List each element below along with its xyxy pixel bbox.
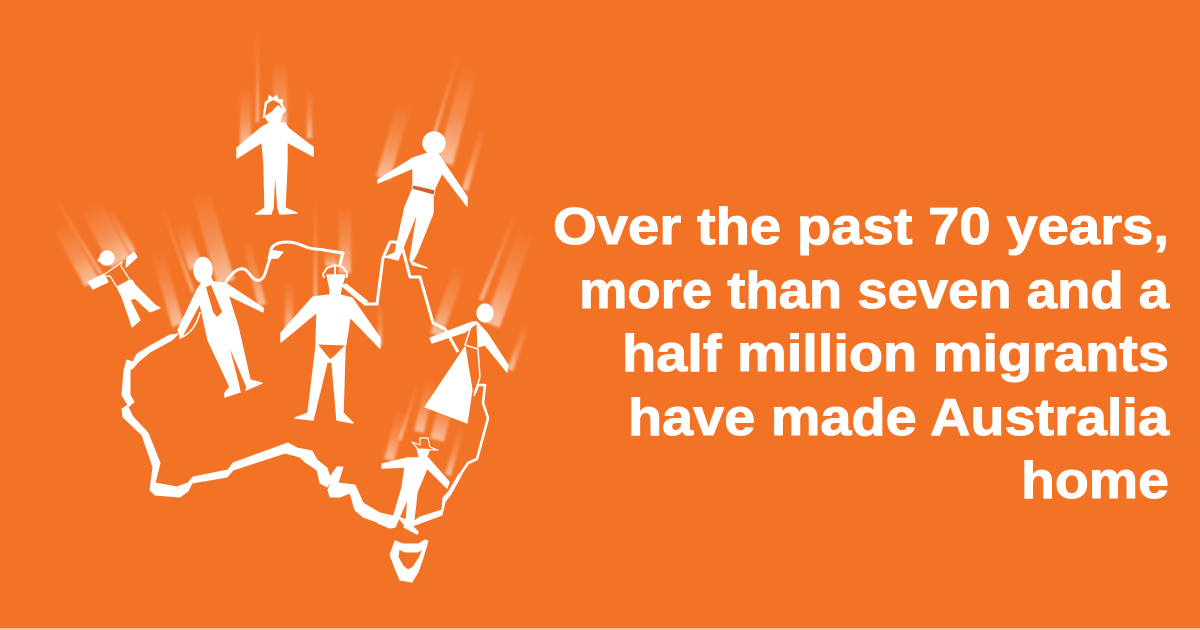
headline line 5: home: [1021, 452, 1169, 510]
figure: woman in dress: [425, 304, 508, 423]
cap: [323, 265, 347, 278]
figure: centre man with cap and briefs: [281, 265, 380, 423]
map: north coast: [226, 242, 343, 282]
headline line 3: half million migrants: [622, 325, 1169, 383]
bodice and skirt outline: [465, 323, 480, 396]
headline line 2: more than seven and a: [579, 262, 1170, 320]
coast strand beside the arm: [179, 312, 200, 338]
map: south-east coast: [398, 474, 461, 527]
headline line 4: have made Australia: [628, 389, 1170, 447]
dress skirt: [425, 347, 472, 423]
map: Tasmania: [390, 540, 428, 582]
figure: man with spiky hair at top: [237, 95, 313, 214]
headline text: [553, 198, 1170, 510]
figure: woman at top right: [378, 132, 467, 268]
map of Australia outline: [122, 242, 488, 582]
figure: man in hat at bottom: [378, 438, 449, 534]
footer strip: [0, 627, 1200, 630]
briefs: [317, 344, 346, 360]
figure: man in suit and tie: [178, 258, 263, 397]
map: hand-like blob on the north coast: [268, 250, 283, 259]
figure: child at left: [88, 251, 160, 327]
strap to map: [342, 284, 367, 305]
light rays behind falling figures: [52, 30, 534, 476]
belt: [412, 185, 435, 195]
arms and shoulder: [430, 322, 508, 372]
map: gulf of Carpentaria: [366, 242, 458, 352]
necktie: [206, 285, 222, 317]
child shirt: [102, 262, 130, 287]
spiky hair: [263, 95, 286, 118]
headline line 1: Over the past 70 years,: [553, 198, 1169, 256]
map: east coast: [460, 385, 488, 475]
map: west and south coast: [122, 334, 398, 525]
hat: [412, 438, 438, 450]
